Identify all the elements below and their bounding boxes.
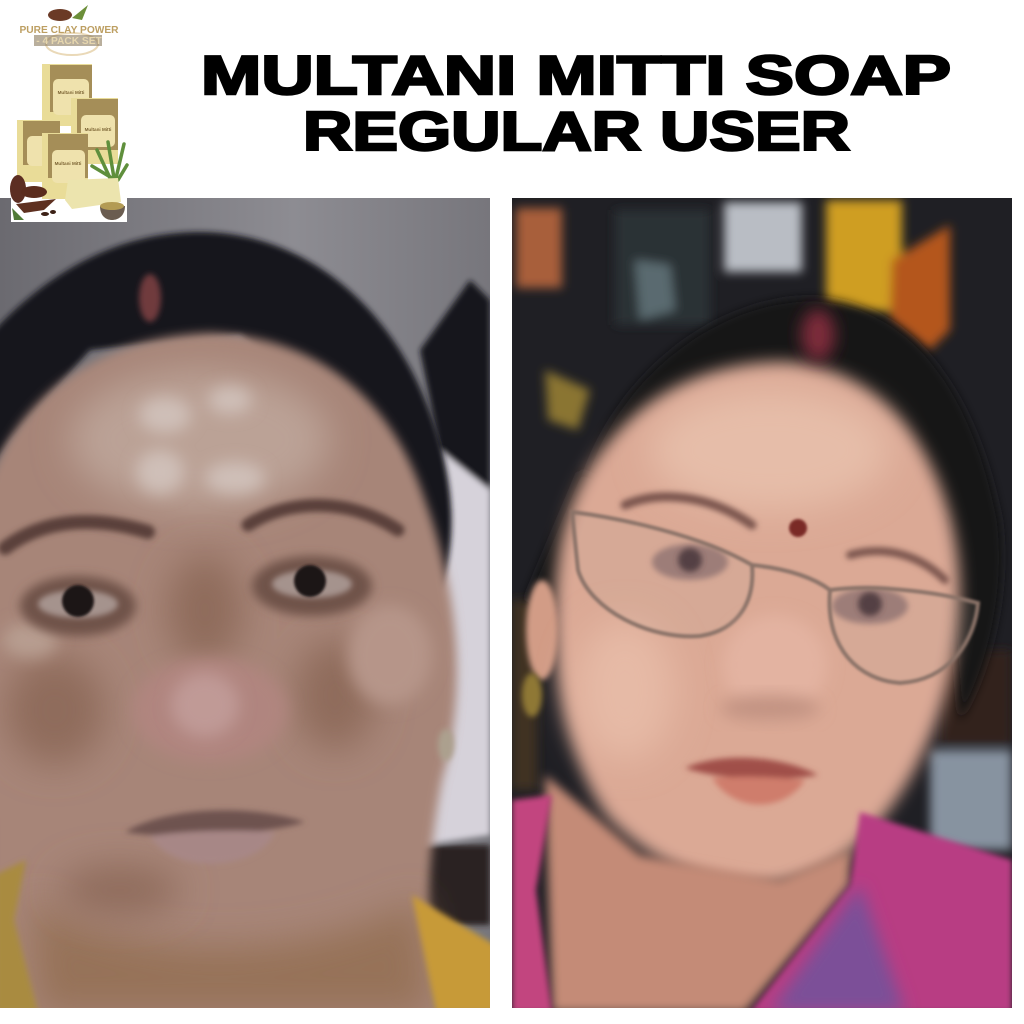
panel: after photo, right portrait: [512, 198, 1012, 1012]
chin shadow and neck: [30, 900, 430, 1012]
earring: [522, 673, 542, 717]
soap boxes: Multani Mitti: [58, 90, 84, 95]
forehead and cheek highlight: [650, 390, 890, 510]
face: [0, 333, 457, 1020]
eyebrows: [625, 497, 945, 580]
eyebrows: [5, 505, 398, 548]
forehead shine: [70, 370, 330, 510]
eyes: [652, 544, 908, 624]
background: dark bag and white cloth: [416, 278, 490, 929]
product heading: - 4 PACK SET: [36, 36, 103, 47]
shirt: [0, 860, 38, 1012]
sari: [512, 795, 552, 1012]
background: wall hangings and frame: [512, 200, 1012, 850]
aloe plant: [92, 142, 127, 180]
eyes: [20, 556, 372, 636]
earring: [438, 729, 454, 761]
product heading: [19, 25, 119, 47]
soap boxes: Multani Mitti: [55, 161, 81, 166]
glasses: [572, 512, 978, 683]
title: MULTANI MITTI SOAP: [201, 44, 951, 106]
soap boxes: Multani Mitti: [85, 127, 111, 132]
pigmented patches on cheeks and nose: [5, 555, 375, 915]
ear: [526, 580, 558, 680]
soap boxes: [17, 64, 118, 199]
parting: [801, 309, 835, 361]
hair: [575, 298, 1002, 720]
nose: [728, 620, 822, 694]
product heading: PURE CLAY POWER: [19, 25, 119, 36]
cocoa pods and beans: [10, 175, 56, 220]
logo emblem: [46, 5, 98, 55]
neck and chest: [545, 775, 850, 1012]
product image: four pack soap set: [10, 0, 127, 222]
bindi: [789, 519, 807, 537]
hair: [0, 232, 452, 590]
hair parting: [139, 274, 161, 322]
soap bar: [65, 178, 121, 209]
mortar: [100, 206, 125, 220]
face: [555, 362, 960, 886]
mouth: [685, 758, 818, 804]
nose: [142, 655, 286, 752]
panel: before photo, left portrait: [0, 198, 495, 1020]
title: [201, 44, 951, 162]
mouth: [125, 810, 305, 864]
title: REGULAR USER: [303, 100, 850, 162]
